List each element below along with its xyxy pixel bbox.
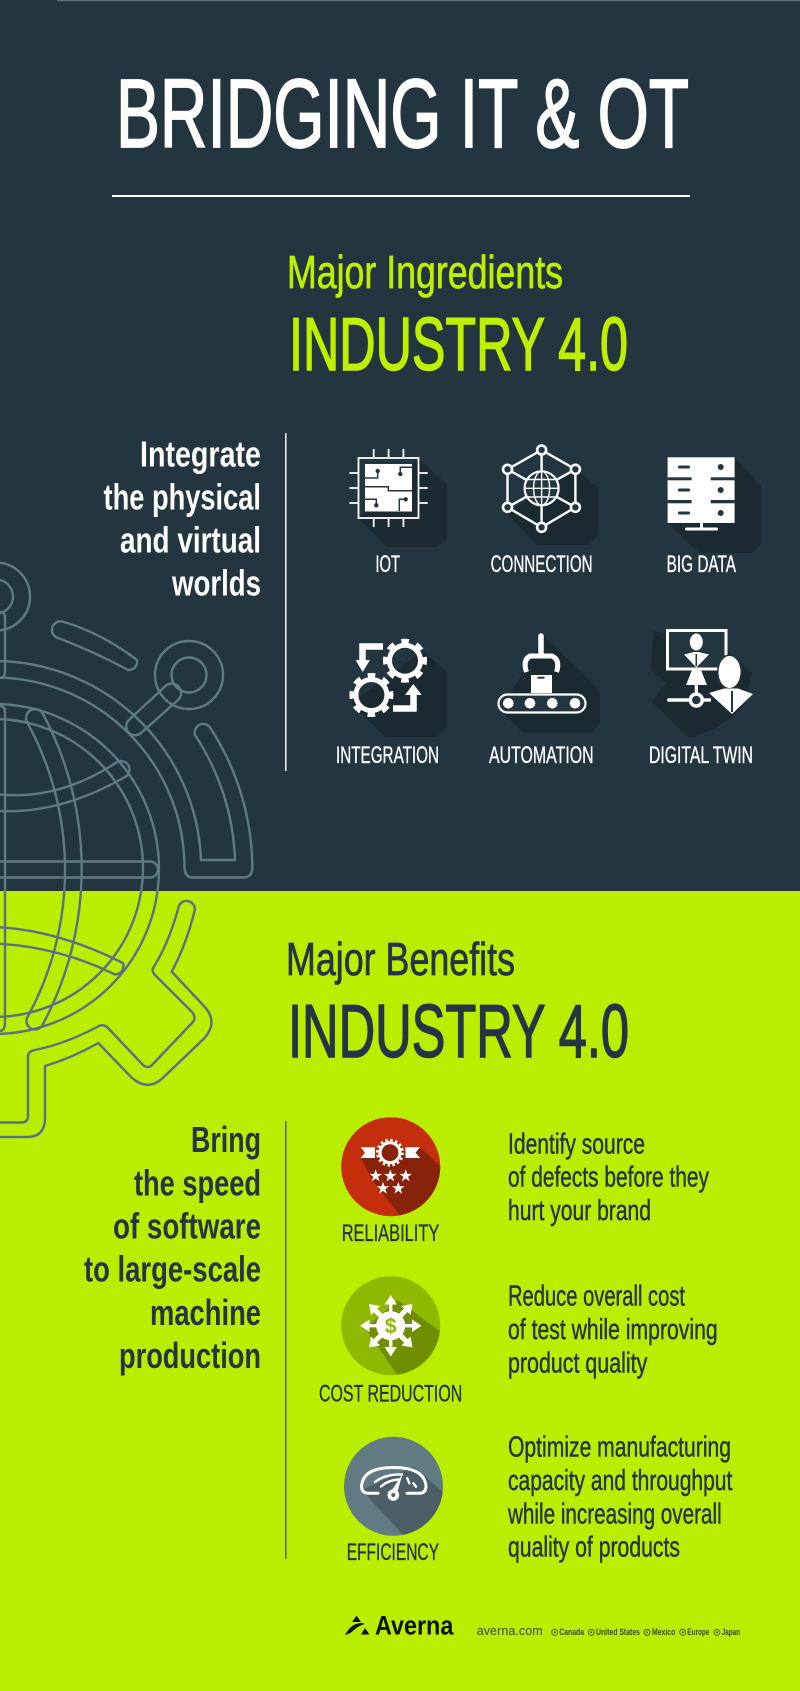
label: IoT: IOT	[375, 551, 400, 578]
logo: Averna	[345, 1610, 454, 1640]
icon: connection network	[503, 446, 598, 545]
icon: automation conveyor	[498, 636, 600, 733]
text: efficiency description	[507, 1432, 732, 1564]
icon: efficiency gauge	[344, 1437, 450, 1540]
icon: digital twin	[651, 630, 753, 738]
text: bring the speed of software: production	[119, 1335, 261, 1376]
text: bring the speed of software: Bring	[191, 1119, 261, 1160]
text: cost reduction description: Reduce overall cost	[508, 1281, 685, 1313]
heading: industry 4.0: INDUSTRY 4.0	[289, 302, 628, 386]
text: locations: Mexico	[652, 1627, 676, 1637]
heading: major ingredients: Major Ingredients	[287, 246, 563, 298]
text: efficiency description: while increasing overall	[507, 1498, 722, 1530]
text: locations: Japan	[722, 1627, 740, 1637]
illustration: globe and gear outline	[0, 563, 252, 1137]
label: efficiency: EFFICIENCY	[347, 1539, 439, 1566]
icon: big data server	[668, 457, 761, 553]
text: cost reduction description: product quality	[508, 1347, 648, 1379]
label: reliability: RELIABILITY	[342, 1220, 439, 1247]
text: bring the speed of software: the speed	[134, 1162, 261, 1203]
logo: Averna: Averna	[375, 1610, 454, 1640]
text: reliability description	[508, 1128, 709, 1227]
icon: integration gears	[351, 641, 447, 737]
text: locations: Canada	[559, 1627, 585, 1637]
text: efficiency description: quality of products	[508, 1532, 680, 1564]
text: integrate the physical and virtual worlds: and virtual	[120, 520, 261, 560]
label: automation: AUTOMATION	[489, 742, 594, 769]
panel: dark top section background	[0, 0, 800, 891]
icon: cost reduction: $	[385, 1315, 397, 1338]
icon: reliability badge	[341, 1117, 445, 1218]
text: website: averna.com	[477, 1624, 543, 1638]
text: integrate the physical and virtual worlds: Integrate	[140, 434, 261, 474]
label: big data: BIG DATA	[667, 551, 736, 578]
label: connection: CONNECTION	[491, 551, 593, 578]
text: reliability description: hurt your brand	[508, 1195, 651, 1227]
panel: green bottom section background	[0, 891, 800, 1691]
text: integrate the physical and virtual worlds: the physical	[104, 476, 261, 518]
heading: industry 4.0: INDUSTRY 4.0	[288, 989, 629, 1073]
heading: major benefits: Major Benefits	[286, 933, 515, 985]
text: bring the speed of software: machine	[150, 1292, 261, 1333]
label: integration: INTEGRATION	[336, 742, 439, 769]
text: locations	[552, 1627, 740, 1637]
icon: IoT chip	[349, 449, 447, 547]
icon: cost reduction	[341, 1276, 445, 1376]
panel: major ingredients	[104, 246, 761, 771]
text: integrate the physical and virtual worlds: worlds	[171, 562, 261, 604]
label: cost reduction: COST REDUCTION	[319, 1381, 462, 1408]
text: bring the speed of software: to large-scale	[84, 1249, 261, 1290]
text: cost reduction description	[508, 1281, 718, 1379]
text: bring the speed of software: of software	[113, 1206, 261, 1246]
text: locations: United States	[596, 1627, 640, 1637]
text: cost reduction description: of test while improving	[508, 1314, 718, 1346]
text: reliability description: Identify source	[508, 1128, 645, 1160]
text: integrate the physical and virtual worlds	[104, 434, 261, 604]
text: locations: Europe	[687, 1627, 709, 1637]
text: bring the speed of software	[84, 1119, 261, 1376]
text: reliability description: of defects before they	[508, 1162, 709, 1194]
footer	[345, 1610, 740, 1640]
panel: major benefits	[84, 933, 732, 1566]
